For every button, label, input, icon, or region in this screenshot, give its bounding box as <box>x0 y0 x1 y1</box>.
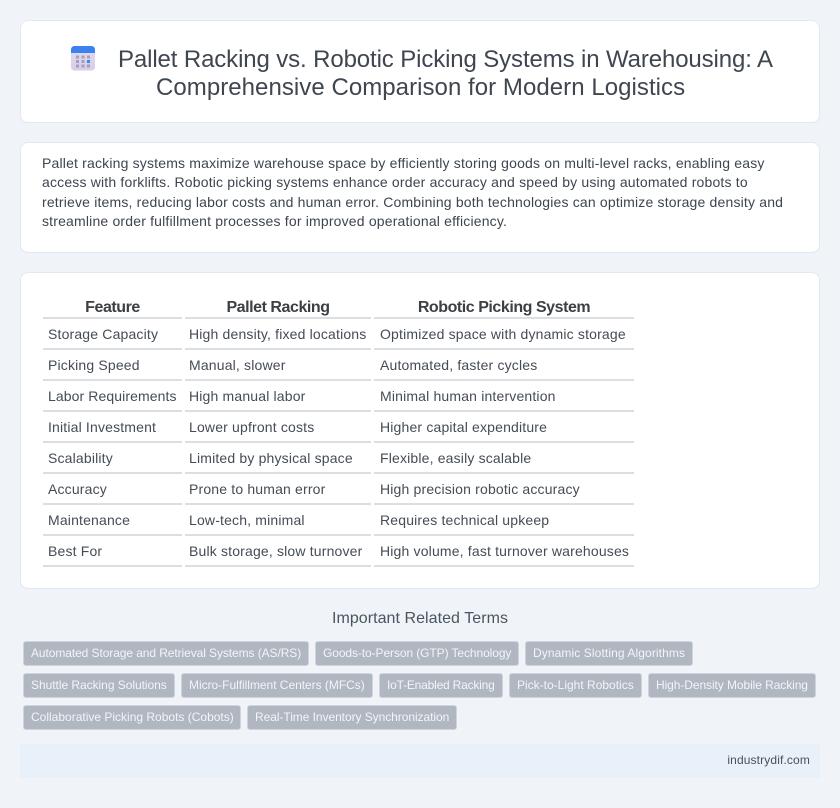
title <box>118 46 773 101</box>
tag list: Shuttle Racking Solutions <box>31 678 167 692</box>
text block: intro paragraph: streamline order fulfillment processes for improved operational efficiency. <box>42 213 507 229</box>
table: comparison: Bulk storage, slow turnover <box>189 543 362 559</box>
icon: calendar grid <box>71 46 95 70</box>
table: comparison: High density, fixed locations <box>189 326 366 342</box>
table: comparison: Picking Speed <box>48 357 140 373</box>
table: comparison: Feature <box>85 299 140 316</box>
panel: header <box>20 20 820 123</box>
table: comparison: Limited by physical space <box>189 450 353 466</box>
table: comparison: Maintenance <box>48 512 130 528</box>
table: comparison: Minimal human intervention <box>380 388 556 404</box>
table: comparison: Requires technical upkeep <box>380 512 549 528</box>
table: comparison <box>43 299 634 567</box>
tag list: Collaborative Picking Robots (Cobots) <box>31 710 234 724</box>
text block: intro paragraph: Pallet racking systems maximize warehouse space by efficiently storing goods on multi-level racks, enabling easy <box>42 155 765 171</box>
title: Comprehensive Comparison for Modern Logistics <box>156 74 685 101</box>
title: Pallet Racking vs. Robotic Picking Systems in Warehousing: A <box>118 46 773 73</box>
table: comparison: Optimized space with dynamic storage <box>380 326 626 342</box>
table: comparison: Prone to human error <box>189 481 325 497</box>
tag list: Micro-Fulfillment Centers (MFCs) <box>189 678 365 692</box>
heading: related terms: Important Related Terms <box>332 610 508 627</box>
table: comparison: Manual, slower <box>189 357 286 373</box>
table: comparison: Storage Capacity <box>48 326 158 342</box>
footer source text: industrydif.com <box>727 753 810 767</box>
table: comparison: Automated, faster cycles <box>380 357 537 373</box>
table: comparison: High manual labor <box>189 388 306 404</box>
table: comparison: Higher capital expenditure <box>380 419 547 435</box>
tag list: Goods-to-Person (GTP) Technology <box>323 646 511 660</box>
tag list: Dynamic Slotting Algorithms <box>533 646 685 660</box>
table: comparison: Low-tech, minimal <box>189 512 305 528</box>
table: comparison: Robotic Picking System <box>418 299 590 316</box>
tag list: Pick-to-Light Robotics <box>517 678 634 692</box>
tag list: IoT-Enabled Racking <box>387 678 495 692</box>
tag list: Automated Storage and Retrieval Systems (AS/RS) <box>31 646 301 660</box>
table: comparison: Best For <box>48 543 102 559</box>
panel: intro <box>20 142 820 253</box>
table: comparison: Initial Investment <box>48 419 156 435</box>
text block: intro paragraph: retrieve items, reducing labor costs and human error. Combining both technologies can optimize storage density and <box>42 194 783 210</box>
table: comparison: Accuracy <box>48 481 107 497</box>
table: comparison: High volume, fast turnover warehouses <box>380 543 629 559</box>
footer <box>20 744 820 778</box>
table: comparison: Scalability <box>48 450 113 466</box>
tag list: Real-Time Inventory Synchronization <box>255 710 449 724</box>
table: comparison: High precision robotic accuracy <box>380 481 580 497</box>
panel: comparison table <box>20 272 820 589</box>
tag list: High-Density Mobile Racking <box>656 678 808 692</box>
table: comparison: Pallet Racking <box>226 299 330 316</box>
table: comparison: Lower upfront costs <box>189 419 314 435</box>
text block: intro paragraph <box>42 155 783 229</box>
table: comparison: Labor Requirements <box>48 388 177 404</box>
table: comparison: Flexible, easily scalable <box>380 450 531 466</box>
text block: intro paragraph: access with forklifts. Robotic picking systems enhance order accuracy and speed by using automated robots to <box>42 174 748 190</box>
